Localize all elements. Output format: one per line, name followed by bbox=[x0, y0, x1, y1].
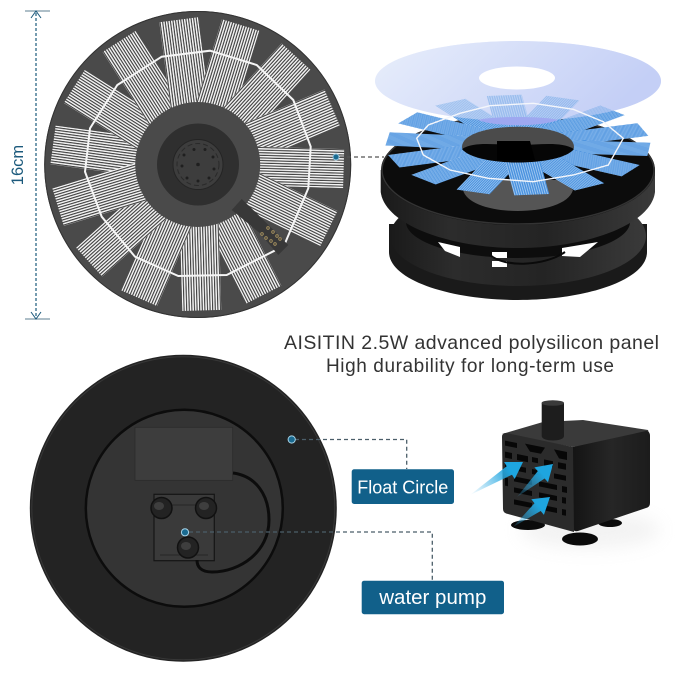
flow arrows bbox=[470, 462, 553, 527]
battery box bbox=[135, 427, 233, 480]
heading text bbox=[284, 332, 659, 377]
connector strip bbox=[232, 199, 288, 255]
fountain nozzle bbox=[157, 124, 239, 206]
heading text: High durability for long-term use bbox=[326, 356, 614, 377]
suction cups bbox=[151, 498, 216, 558]
callout: panel pointer bbox=[333, 154, 384, 160]
translucent lens disc bbox=[375, 41, 661, 121]
callout: float circle bbox=[288, 436, 454, 504]
pump body bbox=[502, 420, 650, 447]
dimension line: 16cm: 16cm bbox=[9, 145, 27, 185]
exposed hub bbox=[462, 127, 574, 162]
wiring ring bbox=[85, 51, 311, 276]
exploded view bbox=[375, 41, 661, 300]
heading text: AISITIN 2.5W advanced polysilicon panel bbox=[284, 332, 659, 354]
lower float disc bbox=[389, 186, 647, 300]
cable bbox=[197, 473, 269, 572]
pump bracket bbox=[154, 494, 214, 561]
callout: water pump bbox=[181, 529, 504, 614]
blue solar cells bbox=[385, 95, 650, 195]
suction feet bbox=[511, 519, 622, 546]
wiring ring bbox=[417, 103, 623, 182]
intake slots bbox=[505, 440, 567, 516]
outlet nozzle bbox=[542, 403, 564, 440]
lens shadow on hub bbox=[478, 117, 558, 125]
solar cell strips bbox=[50, 17, 344, 311]
dimension line: 16cm bbox=[9, 11, 50, 319]
water pump photo bbox=[470, 400, 660, 548]
central hub bbox=[135, 102, 260, 227]
lens overlay on rear cells bbox=[375, 41, 661, 121]
underside view bbox=[30, 355, 337, 662]
callout: water pump: water pump bbox=[378, 586, 486, 609]
solar panel top view bbox=[44, 11, 351, 318]
callout: float circle: Float Circle bbox=[357, 478, 448, 498]
upper float disc bbox=[381, 115, 655, 248]
lens centre hole bbox=[479, 66, 555, 90]
